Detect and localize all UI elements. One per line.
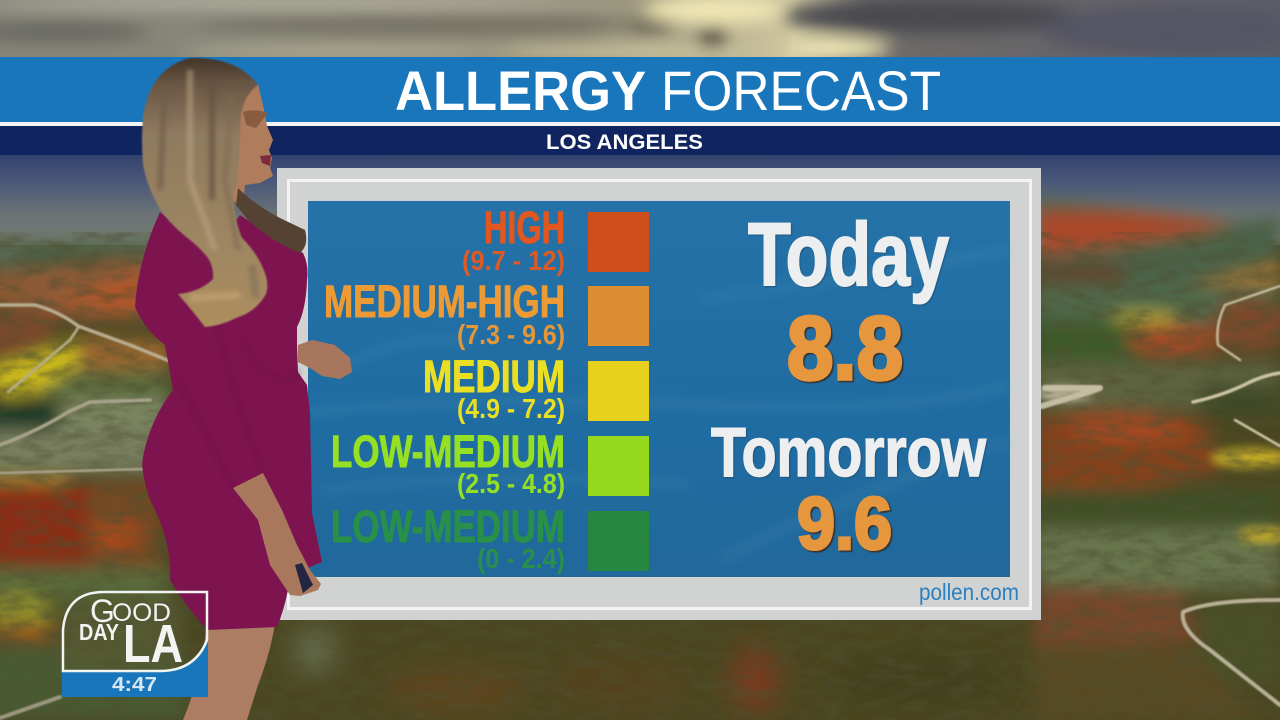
logo frame [63,592,207,671]
title: ALLERGY [395,59,646,122]
legend: low-medium [331,426,649,499]
today label: Today [748,204,949,304]
sky with clouds behind header [0,0,1280,59]
legs [183,606,278,720]
bottom middle [293,626,337,674]
tomorrow value: 9.6 [797,482,892,565]
logo: Good Day LA with clock: OOD [112,599,171,627]
right side hills [1035,198,1280,300]
landscape mottling [0,232,1280,720]
clock time: 4:47 [112,674,157,696]
right side trails [1217,286,1280,360]
blue title bar [0,57,1280,122]
legend: high: (9.7 - 12) [462,245,565,276]
legend: low [331,501,649,574]
legend: medium: (4.9 - 7.2) [457,393,565,424]
lips [260,155,271,166]
dress shading [178,320,300,488]
logo: Good Day LA with clock: DAY [79,619,119,645]
logo wordmark: G [90,593,115,629]
logo: Good Day LA with clock [62,592,208,697]
left side trails [0,305,172,362]
legend: low-medium: LOW-MEDIUM [331,426,565,477]
legend: high: HIGH [484,202,565,253]
eye shadow [243,110,268,128]
back hair [236,188,306,253]
legend: medium-high: MEDIUM-HIGH [324,276,565,327]
face and neck [228,84,273,205]
header banner [0,57,1280,155]
today value: 8.8 [787,299,903,399]
legend: low: (0 - 2.4) [477,543,565,574]
tomorrow label: Tomorrow [711,413,986,491]
legend: high [462,202,649,276]
raised hand [298,340,352,379]
logo: Good Day LA with clock: LA [123,614,183,674]
clock tab [62,640,208,697]
panel: allergy scale and forecast [277,168,1041,620]
blue chart panel [308,201,1010,577]
navy subtitle bar [0,126,1280,155]
dress [135,212,322,630]
legend: low-medium: (2.5 - 4.8) [457,468,565,499]
legend: medium-high [324,276,649,350]
left side hills [0,238,175,268]
presenter [135,58,352,720]
hair streaks [160,70,256,298]
lower arm and hand [233,473,321,596]
header banner: FORECAST [661,59,941,122]
long hair [142,58,267,327]
legend: medium [423,351,649,424]
subtitle: LOS ANGELES [546,131,703,154]
legend: low: LOW-MEDIUM [331,501,565,552]
source credit: pollen.com [919,579,1019,605]
legend: medium-high: (7.3 - 9.6) [457,319,565,350]
handheld clicker [295,563,313,593]
legend: medium: MEDIUM [423,351,565,402]
